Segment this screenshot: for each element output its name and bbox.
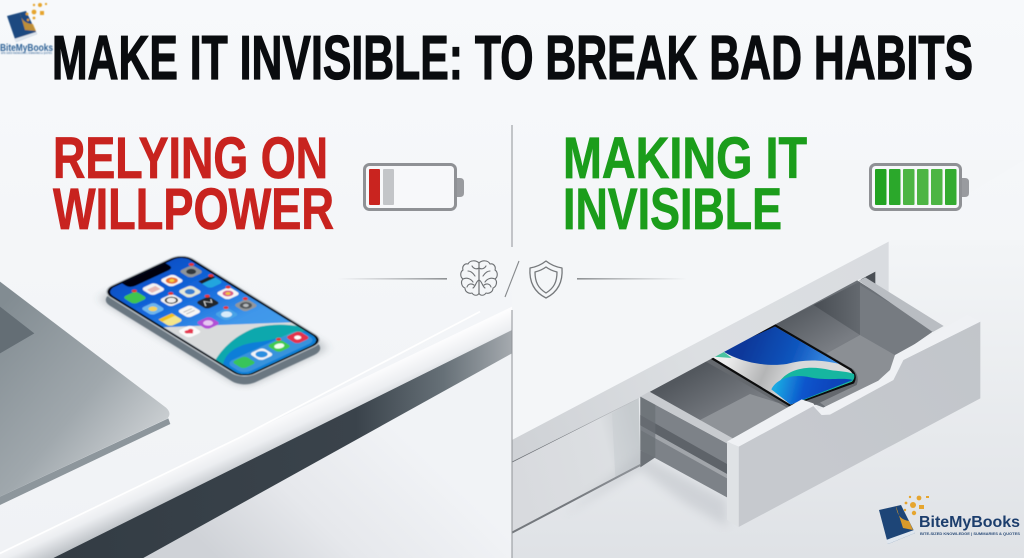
logo wordmark: BiteMyBooks xyxy=(0,42,53,54)
icon: low battery xyxy=(364,164,464,210)
row 3 xyxy=(161,314,182,326)
drawer rim xyxy=(640,392,739,443)
near floor light xyxy=(700,394,790,442)
heading: making it invisible: MAKING IT xyxy=(563,126,807,191)
logo tagline: BITE-SIZED KNOWLEDGE | SUMMARIES & QUOTES xyxy=(920,531,1020,536)
heading: relying on willpower xyxy=(53,126,334,242)
near floor dark xyxy=(650,358,780,420)
teal wave xyxy=(778,368,854,403)
phone shadow xyxy=(96,258,331,389)
drawer shadow xyxy=(562,453,727,527)
desk highlight xyxy=(0,312,480,553)
laptop xyxy=(0,282,170,505)
heading: making it invisible xyxy=(563,126,807,242)
phone casing xyxy=(704,323,858,407)
ideas xyxy=(904,496,929,515)
dock xyxy=(232,356,255,369)
floor below desk xyxy=(143,353,512,558)
drawer side wall xyxy=(640,397,727,497)
teal sliver xyxy=(713,350,732,358)
badges xyxy=(130,262,282,342)
right scene: desk with open drawer xyxy=(512,160,1024,558)
slash between icons xyxy=(505,261,519,297)
center divider xyxy=(512,125,513,558)
phone screen and apps xyxy=(106,255,320,377)
phone bezel xyxy=(709,324,856,407)
desk front face xyxy=(0,307,512,558)
drawer front panel xyxy=(727,315,980,527)
desk shadow strip xyxy=(53,330,512,558)
desk top surface xyxy=(512,160,1024,440)
phone inside drawer xyxy=(704,323,858,407)
far floor xyxy=(773,305,860,353)
heading: relying on willpower: RELYING ON xyxy=(53,126,328,191)
floor right xyxy=(512,240,1024,558)
icon: shield xyxy=(530,261,562,298)
logo: top left xyxy=(0,3,53,55)
desk fascia xyxy=(512,242,889,462)
book xyxy=(7,11,37,42)
divider line left xyxy=(338,278,447,280)
heading: relying on willpower: WILLPOWER xyxy=(53,177,334,242)
icon: full battery xyxy=(870,164,969,210)
phone body edge xyxy=(99,260,327,388)
row 1 xyxy=(122,291,147,304)
logo tagline: BITE-SIZED KNOWLEDGE | SUMMARIES & QUOTES xyxy=(1,51,52,55)
divider line right xyxy=(577,278,687,280)
far side floor xyxy=(860,285,935,356)
far wall xyxy=(813,282,860,335)
logo: bottom right xyxy=(879,496,1020,544)
ideas xyxy=(26,3,47,21)
logo wordmark: BiteMyBooks xyxy=(919,514,1020,531)
left scene: desk with laptop xyxy=(0,282,512,558)
icon: brain xyxy=(461,261,497,295)
left phone on desk xyxy=(96,249,334,389)
book xyxy=(879,505,915,544)
row 2 xyxy=(142,302,164,316)
blue wave xyxy=(771,376,853,405)
drawer interior xyxy=(640,280,935,442)
middle floor light xyxy=(817,335,897,410)
row 4 xyxy=(178,325,200,338)
lower closed drawer xyxy=(512,397,640,533)
silver wallpaper xyxy=(713,327,853,405)
heading: making it invisible: INVISIBLE xyxy=(563,177,782,242)
blue wallpaper xyxy=(722,327,839,365)
dark gap at the back of the drawer xyxy=(861,272,875,287)
